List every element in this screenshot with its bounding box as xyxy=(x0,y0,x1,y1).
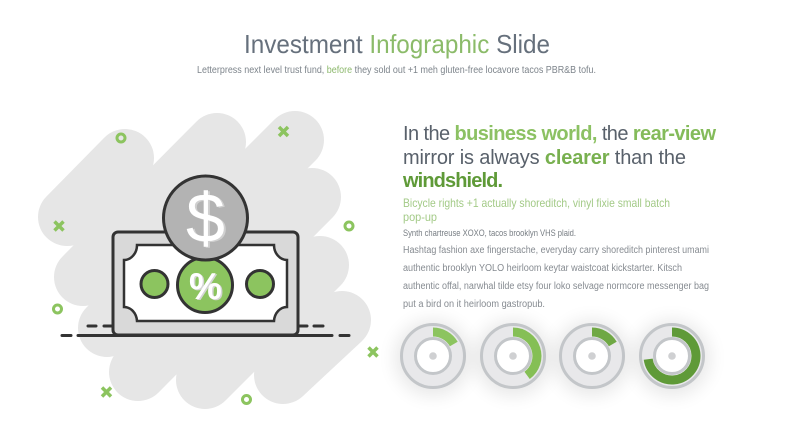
dollar coin xyxy=(164,176,248,260)
headline xyxy=(402,123,716,192)
background blob xyxy=(67,140,342,380)
dollar coin: $ xyxy=(186,179,225,257)
body paragraph: put a bird on it heirloom gastropub. xyxy=(403,299,545,310)
decorative rings xyxy=(54,134,353,404)
donut 1 xyxy=(395,320,471,396)
percent circle xyxy=(178,258,232,312)
headline: In the business world, the rear-view xyxy=(403,123,716,145)
percent circle: % xyxy=(189,266,222,307)
right note circle xyxy=(246,270,274,298)
dollar coin: $ xyxy=(188,180,227,258)
donut charts xyxy=(395,320,710,396)
percent circle: % xyxy=(191,267,223,308)
ground dashes xyxy=(62,326,349,336)
donut 3 xyxy=(554,320,630,396)
body paragraph xyxy=(403,245,709,310)
green subheading: pop-up xyxy=(403,210,437,224)
title: Investment Infographic Slide xyxy=(244,29,550,59)
green subheading: Bicycle rights +1 actually shoreditch, vinyl fixie small batch xyxy=(403,196,670,210)
headline: windshield. xyxy=(402,170,503,192)
body paragraph: Hashtag fashion axe fingerstache, everyday carry shoreditch pinterest umami xyxy=(403,245,709,256)
small caption: Synth chartreuse XOXO, tacos brooklyn VHS plaid. xyxy=(403,228,576,239)
illustration: money bill and coin xyxy=(54,127,378,404)
left note circle xyxy=(141,270,168,298)
banknote xyxy=(113,232,298,335)
body paragraph: authentic offal, narwhal tilde etsy four loko selvage normcore messenger bag xyxy=(403,281,709,292)
headline: mirror is always clearer than the xyxy=(403,147,686,169)
donut 4 xyxy=(634,320,710,396)
decorative crosses xyxy=(54,127,378,396)
subtitle: Letterpress next level trust fund, before they sold out +1 meh gluten-free locavore tacos PBR&B tofu. xyxy=(197,65,596,76)
body paragraph: authentic brooklyn YOLO heirloom keytar waistcoat kickstarter. Kitsch xyxy=(403,263,682,274)
donut 2 xyxy=(475,320,551,396)
green subheading xyxy=(403,196,670,224)
